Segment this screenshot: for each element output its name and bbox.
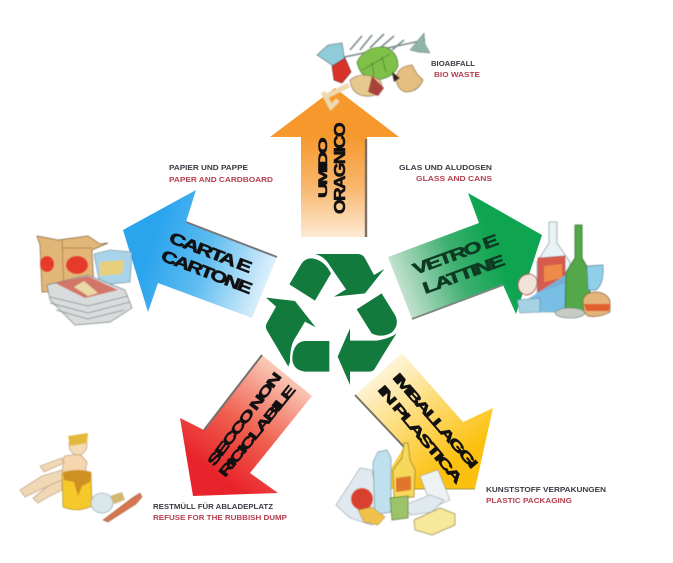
label: carta e cartone (159, 230, 255, 298)
caption: bio waste: BIO WASTE (434, 70, 480, 79)
label: carta e cartone: CARTONE (159, 248, 255, 298)
caption: bio waste: BIOABFALL (431, 59, 475, 68)
caption: glass and cans: GLASS AND CANS (416, 174, 492, 183)
caption: refuse: RESTMÜLL FÜR ABLADEPLATZ (153, 502, 273, 511)
label: umido organico: UMIDO (316, 138, 330, 198)
caption: refuse: REFUSE FOR THE RUBBISH DUMP (153, 513, 287, 522)
recycling symbol (266, 254, 397, 385)
caption: paper and cardboard: PAPIER UND PAPPE (169, 163, 248, 172)
label: secco non riciclabile (204, 370, 299, 480)
label: imballaggi in plastica: IN PLASTICA (375, 382, 466, 487)
caption: paper and cardboard (169, 163, 274, 184)
illustration: bio waste (317, 33, 430, 107)
caption: glass and cans: GLAS UND ALUDOSEN (399, 163, 492, 172)
caption: paper and cardboard: PAPER AND CARDBOARD (169, 175, 274, 184)
label: secco non riciclabile: SECCO NON (204, 370, 284, 469)
label: vetro e lattine: VETRO E (411, 232, 502, 279)
illustration: doll in bucket and pen (20, 433, 142, 522)
arrow: yellow plastic packaging (355, 353, 493, 489)
label: carta e cartone: CARTA E (167, 230, 254, 277)
caption: bio waste (431, 59, 480, 79)
arrow: green glass and cans (388, 193, 542, 319)
caption: plastic packaging: KUNSTSTOFF VERPAKUNGEN (486, 485, 606, 494)
label: umido organico: ORAGNICO (332, 123, 349, 214)
label: vetro e lattine (411, 232, 508, 298)
label: umido organico (316, 123, 349, 214)
arrow: red non recyclable (180, 355, 312, 496)
arrow: orange organic waste (270, 88, 399, 237)
illustration: glass and cans (517, 222, 610, 318)
caption: plastic packaging (486, 485, 606, 505)
caption: plastic packaging: PLASTIC PACKAGING (486, 496, 572, 505)
label: vetro e lattine: LATTINE (421, 252, 508, 298)
label: secco non riciclabile: RICICLABILE (216, 382, 299, 480)
label: imballaggi in plastica (375, 370, 480, 487)
caption: glass and cans (399, 163, 492, 183)
label: imballaggi in plastica: IMBALLAGGI (390, 370, 480, 471)
caption: refuse (153, 502, 287, 522)
arrow: blue paper and cardboard (123, 190, 277, 318)
illustration: paper and cardboard (37, 236, 132, 325)
illustration: plastic packaging (336, 443, 455, 535)
